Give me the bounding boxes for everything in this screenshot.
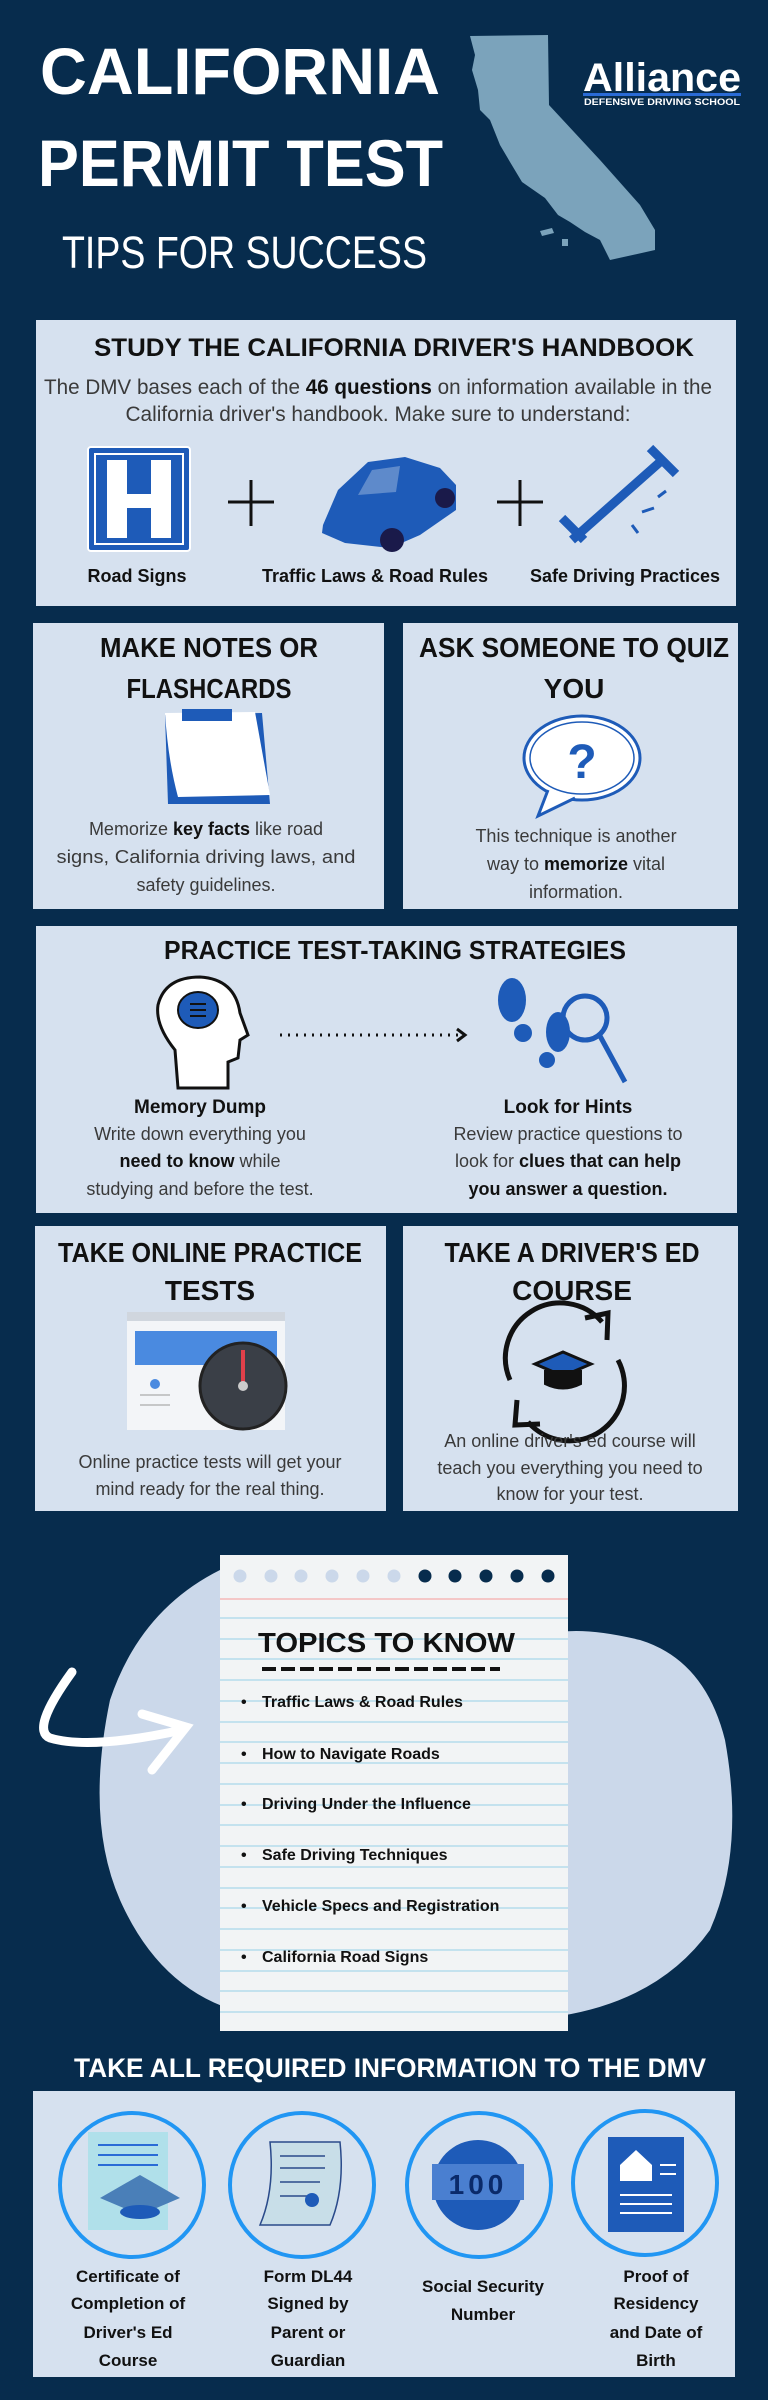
- panel: online practice tests: mind ready for the real thing.: [95, 1479, 325, 1499]
- panel: make notes: FLASHCARDS: [126, 673, 292, 704]
- panel: required documents: Parent or: [271, 2323, 346, 2342]
- arrow: dotted: [280, 1029, 465, 1041]
- panel: study handbook: Road Signs: [87, 566, 187, 586]
- icon: cycle graduation cap: [505, 1303, 624, 1441]
- panel: study handbook: Safe Driving Practices: [530, 566, 720, 586]
- panel: make notes: [33, 623, 384, 909]
- panel: test-taking strategies: need to know while: [119, 1151, 281, 1171]
- panel: required documents: Proof of: [623, 2267, 689, 2286]
- logo: alliance: Alliance: [583, 56, 741, 100]
- icon: footprints magnifier: [498, 978, 625, 1082]
- icon: speech bubble: ?: [567, 736, 597, 789]
- panel: topics to know notepad: •: [241, 1796, 247, 1813]
- panel: ask someone: ASK SOMEONE TO QUIZ: [419, 632, 729, 663]
- panel: test-taking strategies: studying and before the test.: [86, 1179, 314, 1199]
- panel: online practice tests: TAKE ONLINE PRACTICE: [58, 1237, 362, 1268]
- icon: browser speedometer: [127, 1312, 286, 1430]
- panel: topics to know notepad: TOPICS TO KNOW: [258, 1627, 516, 1658]
- panel: topics to know notepad: [220, 1555, 568, 2031]
- panel: ask someone: information.: [529, 882, 623, 902]
- panel: online practice tests: Online practice tests will get your: [78, 1452, 342, 1472]
- panel: topics to know notepad: •: [241, 1746, 247, 1763]
- panel: drivers ed course: know for your test.: [496, 1484, 644, 1504]
- icon: social security counter: [432, 2140, 524, 2230]
- panel: required documents: and Date of: [610, 2323, 703, 2342]
- panel: make notes: safety guidelines.: [136, 875, 276, 895]
- title: [38, 34, 443, 278]
- panel: topics to know notepad: •: [241, 1898, 247, 1915]
- icon: residency document: [608, 2137, 684, 2232]
- panel: required documents: Driver's Ed: [83, 2323, 173, 2342]
- panel: test-taking strategies: Memory Dump: [134, 1097, 266, 1118]
- panel: online practice tests: TESTS: [165, 1275, 255, 1306]
- panel: drivers ed course: An online driver's ed course will: [444, 1431, 696, 1451]
- panel: topics to know notepad: How to Navigate Roads: [262, 1746, 440, 1763]
- icon: plus: [228, 480, 274, 526]
- panel: required documents: Guardian: [271, 2351, 345, 2370]
- panel: make notes: MAKE NOTES OR: [100, 632, 318, 663]
- panel: test-taking strategies: Review practice questions to: [453, 1124, 683, 1144]
- panel: drivers ed course: TAKE A DRIVER'S ED: [444, 1237, 700, 1268]
- panel: test-taking strategies: you answer a question.: [468, 1179, 668, 1199]
- icon: plus: [497, 480, 543, 526]
- panel: online practice tests: [35, 1226, 386, 1511]
- panel: drivers ed course: COURSE: [512, 1275, 632, 1306]
- icon: notepad: [165, 709, 270, 804]
- panel: required documents: Birth: [636, 2351, 676, 2370]
- panel: required documents: Residency: [613, 2294, 699, 2313]
- icon: head: [158, 977, 248, 1088]
- panel: topics to know notepad: •: [241, 1694, 247, 1711]
- icon: california map: [470, 35, 655, 260]
- panel: required documents: [33, 2091, 735, 2377]
- icon: speech bubble: [524, 716, 640, 816]
- panel: topics to know notepad: •: [241, 1949, 247, 1966]
- icon: road sign H: [88, 447, 190, 551]
- panel: ask someone: This technique is another: [475, 826, 677, 846]
- panel: topics to know notepad: •: [241, 1847, 247, 1864]
- panel: study handbook: The DMV bases each of the 46 questions on information available in the: [44, 376, 712, 399]
- heading: take all required information: TAKE ALL REQUIRED INFORMATION TO THE DMV: [74, 2053, 706, 2083]
- panel: topics to know notepad: Vehicle Specs and Registration: [262, 1898, 499, 1915]
- panel: required documents: Form DL44: [264, 2267, 353, 2286]
- panel: test-taking strategies: Look for Hints: [504, 1097, 632, 1118]
- icon: certificate: [88, 2132, 180, 2230]
- panel: test-taking strategies: look for clues that can help: [455, 1151, 681, 1171]
- title: TIPS FOR SUCCESS: [62, 227, 427, 278]
- panel: test-taking strategies: Write down everything you: [94, 1124, 306, 1144]
- icon: car: [322, 457, 456, 552]
- panel: required documents: Signed by: [267, 2294, 349, 2313]
- panel: required documents: Number: [451, 2305, 515, 2324]
- panel: ask someone: [403, 623, 738, 909]
- icon: form scroll: [260, 2142, 341, 2225]
- panel: required documents: Completion of: [71, 2294, 185, 2313]
- panel: study handbook: STUDY THE CALIFORNIA DRIVER'S HANDBOOK: [94, 334, 694, 362]
- title: PERMIT TEST: [38, 126, 443, 200]
- panel: required documents: Social Security: [422, 2277, 544, 2296]
- panel: required documents: Course: [99, 2351, 157, 2370]
- panel: study handbook: [36, 320, 736, 606]
- panel: study handbook: California driver's handbook. Make sure to understand:: [126, 403, 630, 426]
- title: CALIFORNIA: [40, 34, 440, 108]
- icon: social security counter: 100: [449, 2169, 507, 2200]
- panel: ask someone: way to memorize vital: [486, 854, 665, 874]
- icon: safety belt: [562, 448, 676, 540]
- panel: make notes: Memorize key facts like road: [89, 819, 323, 839]
- panel: study handbook: Traffic Laws & Road Rules: [262, 566, 488, 586]
- panel: topics to know notepad: Traffic Laws & Road Rules: [262, 1694, 463, 1711]
- panel: drivers ed course: [403, 1226, 738, 1511]
- panel: required documents: Certificate of: [76, 2267, 180, 2286]
- panel: topics to know notepad: Driving Under the Influence: [262, 1796, 471, 1813]
- panel: drivers ed course: teach you everything you need to: [437, 1458, 703, 1478]
- panel: test-taking strategies: [36, 926, 737, 1213]
- arrow: white curved: [44, 1672, 186, 1770]
- panel: ask someone: YOU: [544, 673, 604, 704]
- blob background: [100, 1570, 732, 2016]
- panel: topics to know notepad: California Road Signs: [262, 1949, 428, 1966]
- panel: test-taking strategies: PRACTICE TEST-TAKING STRATEGIES: [164, 935, 626, 965]
- logo: alliance: DEFENSIVE DRIVING SCHOOL: [584, 97, 741, 107]
- panel: make notes: signs, California driving laws, and: [56, 847, 356, 867]
- panel: topics to know notepad: Safe Driving Techniques: [262, 1847, 448, 1864]
